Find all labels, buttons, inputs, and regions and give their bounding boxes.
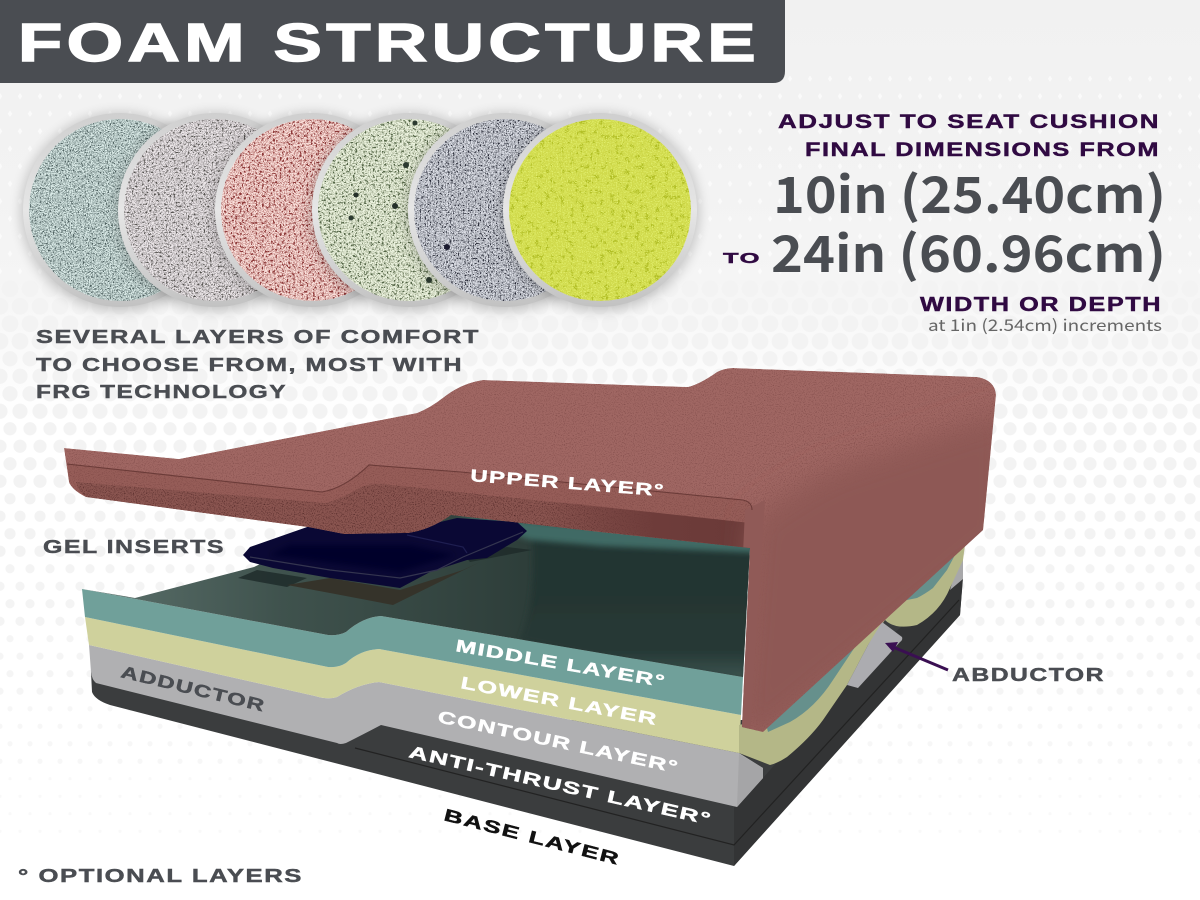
dimensions text block: 24in (60.96cm) (771, 215, 1166, 287)
dimensions text block (723, 111, 1166, 336)
label: contour layer: CONTOUR LAYER° (436, 707, 681, 777)
title banner: FOAM STRUCTURE (18, 13, 760, 73)
foam disc 5 (406, 113, 604, 311)
label: base layer: BASE LAYER (442, 805, 622, 869)
dimensions text block: WIDTH OR DEPTH (920, 294, 1162, 316)
cushion cross-section (64, 368, 1010, 869)
foam disc 2 (116, 113, 314, 311)
title banner (0, 0, 785, 83)
label: anti-thrust layer: ANTI-THRUST LAYER° (407, 742, 714, 829)
dimensions text block: at 1in (2.54cm) increments (928, 312, 1162, 336)
comfort description text: FRG TECHNOLOGY (36, 381, 287, 402)
arrow: abductor pointer (885, 642, 948, 670)
foam disc 3 (213, 113, 411, 311)
dimensions text block: 10in (25.40cm) (773, 156, 1166, 228)
upper layer (64, 368, 1010, 740)
foam disc 4 (310, 113, 508, 311)
foam disc 6 (501, 113, 699, 311)
label: middle layer: MIDDLE LAYER° (454, 636, 667, 691)
label: gel inserts: GEL INSERTS (43, 536, 225, 557)
lower layer (85, 617, 741, 753)
contour and adductor layer (89, 645, 763, 807)
label: abductor: ABDUCTOR (952, 664, 1105, 685)
base layer (91, 575, 963, 866)
label: lower layer: LOWER LAYER (459, 673, 659, 729)
gel inserts (243, 518, 527, 588)
label: upper layer: UPPER LAYER° (470, 466, 666, 500)
middle layer top surface (82, 508, 760, 680)
comfort description text (36, 326, 480, 402)
comfort description text: SEVERAL LAYERS OF COMFORT (36, 326, 480, 347)
right side layers (739, 540, 965, 765)
foam disc 1 (21, 113, 219, 311)
abductor wedge (847, 622, 902, 688)
footnote: optional layers: ° OPTIONAL LAYERS (18, 865, 303, 886)
label: adductor: ADDUCTOR (119, 662, 267, 716)
dimensions text block: FINAL DIMENSIONS FROM (805, 139, 1160, 161)
middle layer (82, 589, 743, 715)
dimensions text block: TO (723, 250, 761, 267)
foam sample discs (21, 113, 699, 311)
comfort description text: TO CHOOSE FROM, MOST WITH (36, 354, 463, 375)
dimensions text block: ADJUST TO SEAT CUSHION (778, 111, 1160, 133)
